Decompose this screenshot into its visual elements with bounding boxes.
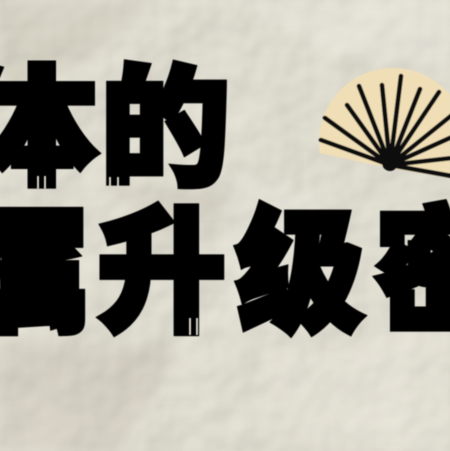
fan hub [382, 155, 398, 171]
character de: 的 [101, 57, 230, 202]
fan backing [318, 68, 450, 178]
fan ribs [321, 76, 450, 176]
character sheng: 升 [98, 198, 225, 349]
headline line 2 [0, 198, 450, 349]
character ji: 级 [236, 198, 363, 349]
headline line 1 [0, 57, 230, 202]
brush fringe cuts on strokes [38, 176, 197, 335]
fan icon [318, 68, 450, 179]
